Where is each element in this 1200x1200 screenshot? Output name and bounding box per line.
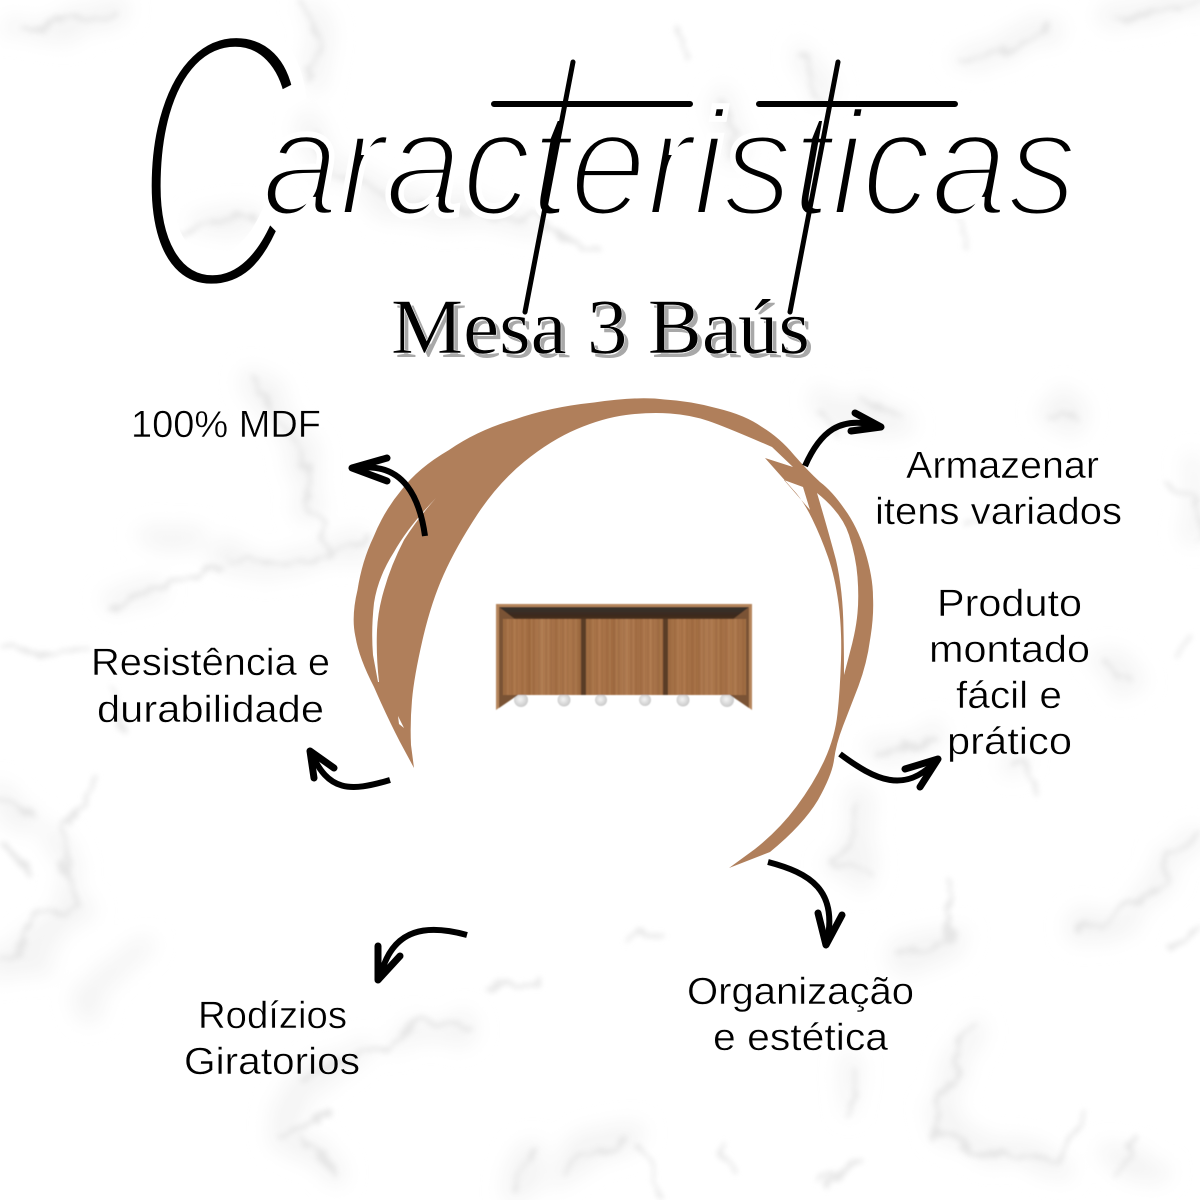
label: 100% MDF: 100% MDF xyxy=(131,404,321,446)
label: Produto montado fácil e prático: Produto xyxy=(937,583,1082,625)
arrow: to Organização e estética xyxy=(768,862,842,945)
title: Caracteristicas: aracteristicas xyxy=(262,79,1077,247)
arrow: to Armazenar itens variados xyxy=(805,413,881,466)
label: Organização e estética xyxy=(687,971,914,1059)
label: Produto montado fácil e prático: fácil e xyxy=(956,675,1062,717)
product: table with three wooden chests xyxy=(496,604,752,710)
brush circle xyxy=(354,398,873,868)
label: Rodízios Giratorios: Giratorios xyxy=(184,1041,360,1083)
arrow: to Produto montado xyxy=(840,754,938,787)
label: Resistência e durabilidade: durabilidade xyxy=(97,689,324,731)
label: Armazenar itens variados: itens variados xyxy=(875,491,1122,533)
label: Produto montado fácil e prático: montado xyxy=(929,629,1090,671)
label: Produto montado fácil e prático: prático xyxy=(947,721,1072,763)
label: Organização e estética: Organização xyxy=(687,971,914,1013)
arrow: to 100% MDF xyxy=(352,458,425,536)
subtitle: Mesa 3 Baús: Mesa 3 Baús xyxy=(391,283,810,370)
arrow: to Resistência e durabilidade xyxy=(310,751,390,787)
label: Rodízios Giratorios: Rodízios xyxy=(198,995,347,1037)
label: Resistência e durabilidade xyxy=(91,642,330,731)
label: Produto montado fácil e prático xyxy=(929,583,1090,763)
label: Rodízios Giratorios xyxy=(184,995,360,1083)
label: Resistência e durabilidade: Resistência e xyxy=(91,642,330,684)
subtitle: Mesa 3 Baús: Mesa 3 Baús xyxy=(395,287,814,374)
title: Caracteristicas xyxy=(133,0,1077,370)
label: Organização e estética: e estética xyxy=(713,1017,889,1059)
label: Armazenar itens variados: Armazenar xyxy=(906,445,1099,487)
label: Armazenar itens variados xyxy=(875,445,1122,533)
caster wheels xyxy=(514,693,734,707)
arrow: to Rodízios Giratorios xyxy=(378,930,467,980)
